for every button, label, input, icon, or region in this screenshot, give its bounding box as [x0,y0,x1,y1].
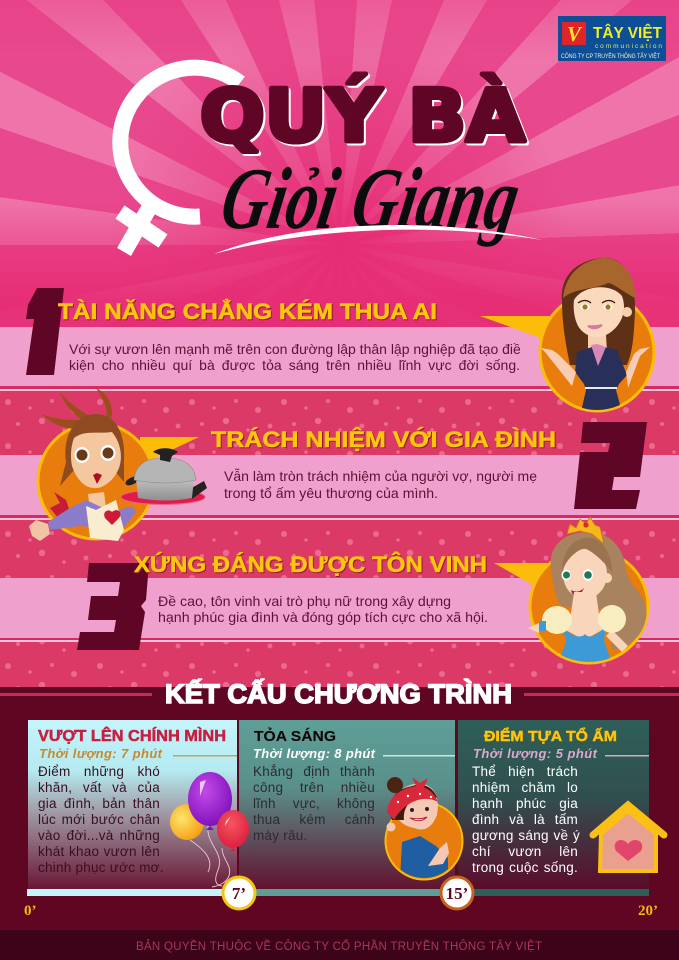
card text: khăn, vất và của [38,780,160,795]
card text: gương sáng về ý [472,828,580,843]
logo: Tây Việt [558,16,666,61]
card text: nhiệm chăm lo [472,780,578,795]
panel: Vượt lên chính mình [28,720,237,889]
panel: Điểm tựa tổ ấm [458,720,649,889]
panel: Tỏa sáng [239,720,455,889]
card text: Điểm những khó [38,764,160,779]
label: 20 minutes: 20’ [638,903,658,919]
card heading: ĐIỂM TỰA TỔ ẤM [484,727,617,745]
icon: house with heart [593,805,664,871]
title: Giỏi Giang script: Giỏi Giang [215,151,527,248]
card text: Thể hiện trách [472,764,578,779]
section: programme structure background [0,687,679,960]
character: princess with crown [494,517,648,664]
card text: khát khao vươn lên [38,844,160,859]
text: section 3: hạnh phúc gia đình và đóng góp tích cực cho xã hội. [158,609,488,625]
logo: Tây Việt: V [567,22,583,46]
text: section 3: Đề cao, tôn vinh vai trò phụ nữ trong xây dựng [158,593,451,609]
card text: lĩnh vực, không [253,796,375,811]
icon: balloons [170,772,249,887]
character: housewife holding pot [29,388,207,541]
logo: Tây Việt: TÂY VIỆT [593,24,663,42]
text: section 1: Với sự vươn lên mạnh mẽ trên con đường lập thân lập nghiệp đã tạo điều [69,341,520,357]
heading: section 1: TÀI NĂNG CHẲNG KÉM THUA AI [58,299,437,324]
card heading: TỎA SÁNG [254,727,336,745]
card text: công trên nhiều [253,780,375,795]
marker: 7 minutes [223,877,255,909]
card text: chí vươn lên [472,844,578,859]
heading: section 2: TRÁCH NHIỆM VỚI GIA ĐÌNH [211,427,556,452]
marker: 15 minutes [441,877,473,909]
logo: Tây Việt: CÔNG TY CP TRUYỀN THÔNG TÂY VIỆT [561,52,660,60]
marker: 15 minutes: 15’ [446,884,468,903]
dotted red lower background [0,386,679,688]
text: section 2 [224,468,537,501]
card text [38,764,164,878]
band: section 3 [0,578,679,642]
logo: Tây Việt: communication [595,43,662,50]
card text: trong cuộc sống. [472,860,578,875]
heading: section 3: XỨNG ĐÁNG ĐƯỢC TÔN VINH [134,552,487,577]
timeline bar [27,889,649,896]
text: section 1 [69,341,520,375]
text: section 2: trong tổ ấm yêu thương của mình. [224,485,438,501]
card text: vào đời...và những [38,828,160,843]
card text: đình và là tấm [472,812,578,827]
card text [472,764,584,878]
card text: lúc mới bước chân [38,812,160,827]
card text: Khẳng định thành [253,764,375,779]
character: businesswoman in speech bubble [480,258,654,412]
band: section 2 [0,455,679,520]
number 3 [77,563,149,650]
text: section 3 [158,593,488,625]
text: section 1: kiện cho nhiều quí bà được tỏa sáng trên nhiều lĩnh vực đời sống. [69,357,520,373]
card text: thua kém cánh [253,812,375,827]
swoosh under title [214,225,543,254]
footer [0,930,679,960]
card text: mày râu. [253,828,308,843]
background: pink sunburst rays [0,0,679,340]
card heading: VƯỢT LÊN CHÍNH MÌNH [38,727,226,745]
number 1 [26,288,64,375]
footer: BẢN QUYỀN THUỘC VỀ CÔNG TY CỔ PHẦN TRUYỀN THÔNG TÂY VIỆT [136,940,542,953]
icon: female symbol [120,68,240,252]
marker: 7 minutes: 7’ [232,884,246,903]
card text: gia đình, bản thân [38,796,160,811]
card text: hạnh phúc gia [472,796,578,811]
card text: chinh phục ước mơ. [38,860,164,875]
title: Quý Bà: QUÝ BÀ [200,74,525,158]
number 2 [574,422,647,509]
heading: Kết cấu chương trình: KẾT CẤU CHƯƠNG TRÌNH [165,678,512,709]
duration: Thời lượng: 8 phút [253,746,376,761]
band: section 1 [0,327,679,391]
label: 0 minutes: 0’ [24,903,36,919]
duration: Thời lượng: 7 phút [39,746,163,761]
text: section 2: Vẫn làm tròn trách nhiệm của người vợ, người mẹ [224,468,537,484]
duration: Thời lượng: 5 phút [473,746,598,761]
card text [253,764,377,848]
character: woman with red bandana [386,777,462,880]
